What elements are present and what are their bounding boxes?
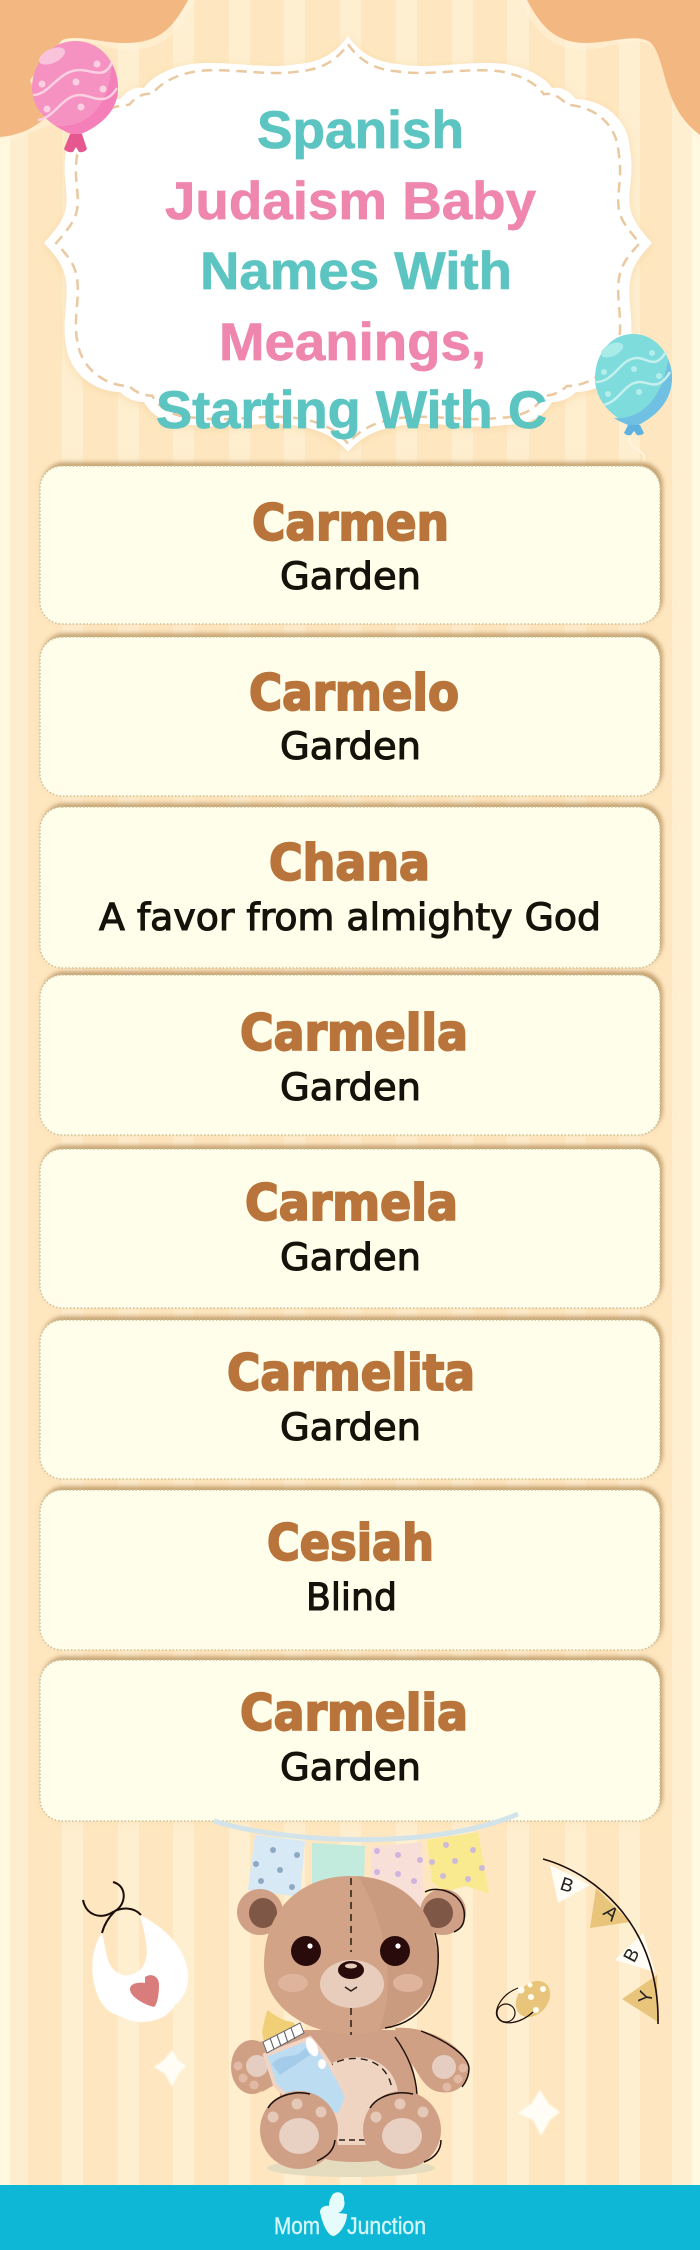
icon: bib — [83, 1882, 188, 2022]
left ear — [237, 1889, 283, 1935]
icon: star left — [154, 2050, 186, 2087]
icon: baby banner: B — [620, 1945, 644, 1966]
top drips: pale under-layer — [0, 0, 700, 145]
bunting flags — [214, 1814, 518, 1910]
card: Cesiah: Cesiah — [267, 1514, 434, 1572]
pink balloon — [32, 41, 118, 152]
head — [264, 1876, 450, 2040]
card: Carmelo: Carmelo — [249, 664, 459, 722]
icon: baby banner — [543, 1859, 658, 2024]
card: Carmelo: Garden — [280, 725, 421, 768]
card: Cesiah: Blind — [306, 1576, 397, 1619]
icon: baby banner: A — [599, 1902, 622, 1926]
card: Carmelita: Carmelita — [227, 1344, 475, 1402]
footer bar — [0, 2185, 700, 2250]
icon: baby banner: B — [557, 1874, 576, 1898]
card: Carmelita: Garden — [280, 1406, 421, 1449]
body — [279, 2030, 418, 2162]
card: Carmelia: Carmelia — [240, 1684, 468, 1742]
top drips: orange corners — [0, 0, 700, 137]
title: Names With — [200, 242, 512, 301]
card: Carmela — [40, 1149, 660, 1308]
teddy bear with bottle — [231, 1876, 469, 2177]
card: Chana — [40, 807, 660, 968]
right foot — [363, 2091, 441, 2169]
ground shadow — [267, 2159, 435, 2177]
title badge — [44, 36, 652, 452]
right ear — [420, 1889, 466, 1935]
card: Carmella — [40, 975, 660, 1135]
logo: MomJunction — [274, 2192, 426, 2240]
card: Carmelia: Garden — [280, 1746, 421, 1789]
belly patch — [325, 2037, 417, 2145]
card: Carmela: Garden — [280, 1236, 421, 1279]
icon: safety pin — [496, 1974, 557, 2024]
logo: MomJunction: Junction — [347, 2213, 426, 2240]
title: Starting With C — [156, 381, 547, 440]
blue balloon — [595, 334, 672, 475]
logo: MomJunction: Mom — [274, 2213, 320, 2240]
card: Carmen: Carmen — [252, 494, 449, 552]
title: Meanings, — [219, 313, 486, 372]
card: Carmella: Garden — [280, 1066, 421, 1109]
card: Carmelita — [40, 1320, 660, 1479]
left foot — [260, 2091, 338, 2169]
card: Carmela: Carmela — [245, 1174, 458, 1232]
icon: star right — [518, 2090, 560, 2136]
icon: baby banner: Y — [635, 1989, 658, 2005]
baby bottle — [262, 2010, 347, 2115]
title — [156, 101, 547, 440]
card: Carmelo — [40, 637, 660, 796]
card: Cesiah — [40, 1490, 660, 1650]
card: Carmen — [40, 466, 660, 624]
card: Carmelia — [40, 1660, 660, 1821]
card: Carmen: Garden — [280, 555, 421, 598]
card: Chana: A favor from almighty God — [99, 896, 601, 939]
card: Chana: Chana — [269, 834, 430, 892]
card: Carmella: Carmella — [240, 1004, 468, 1062]
arms — [231, 2028, 469, 2094]
title: Judaism Baby — [165, 172, 537, 231]
title: Spanish — [257, 101, 464, 160]
